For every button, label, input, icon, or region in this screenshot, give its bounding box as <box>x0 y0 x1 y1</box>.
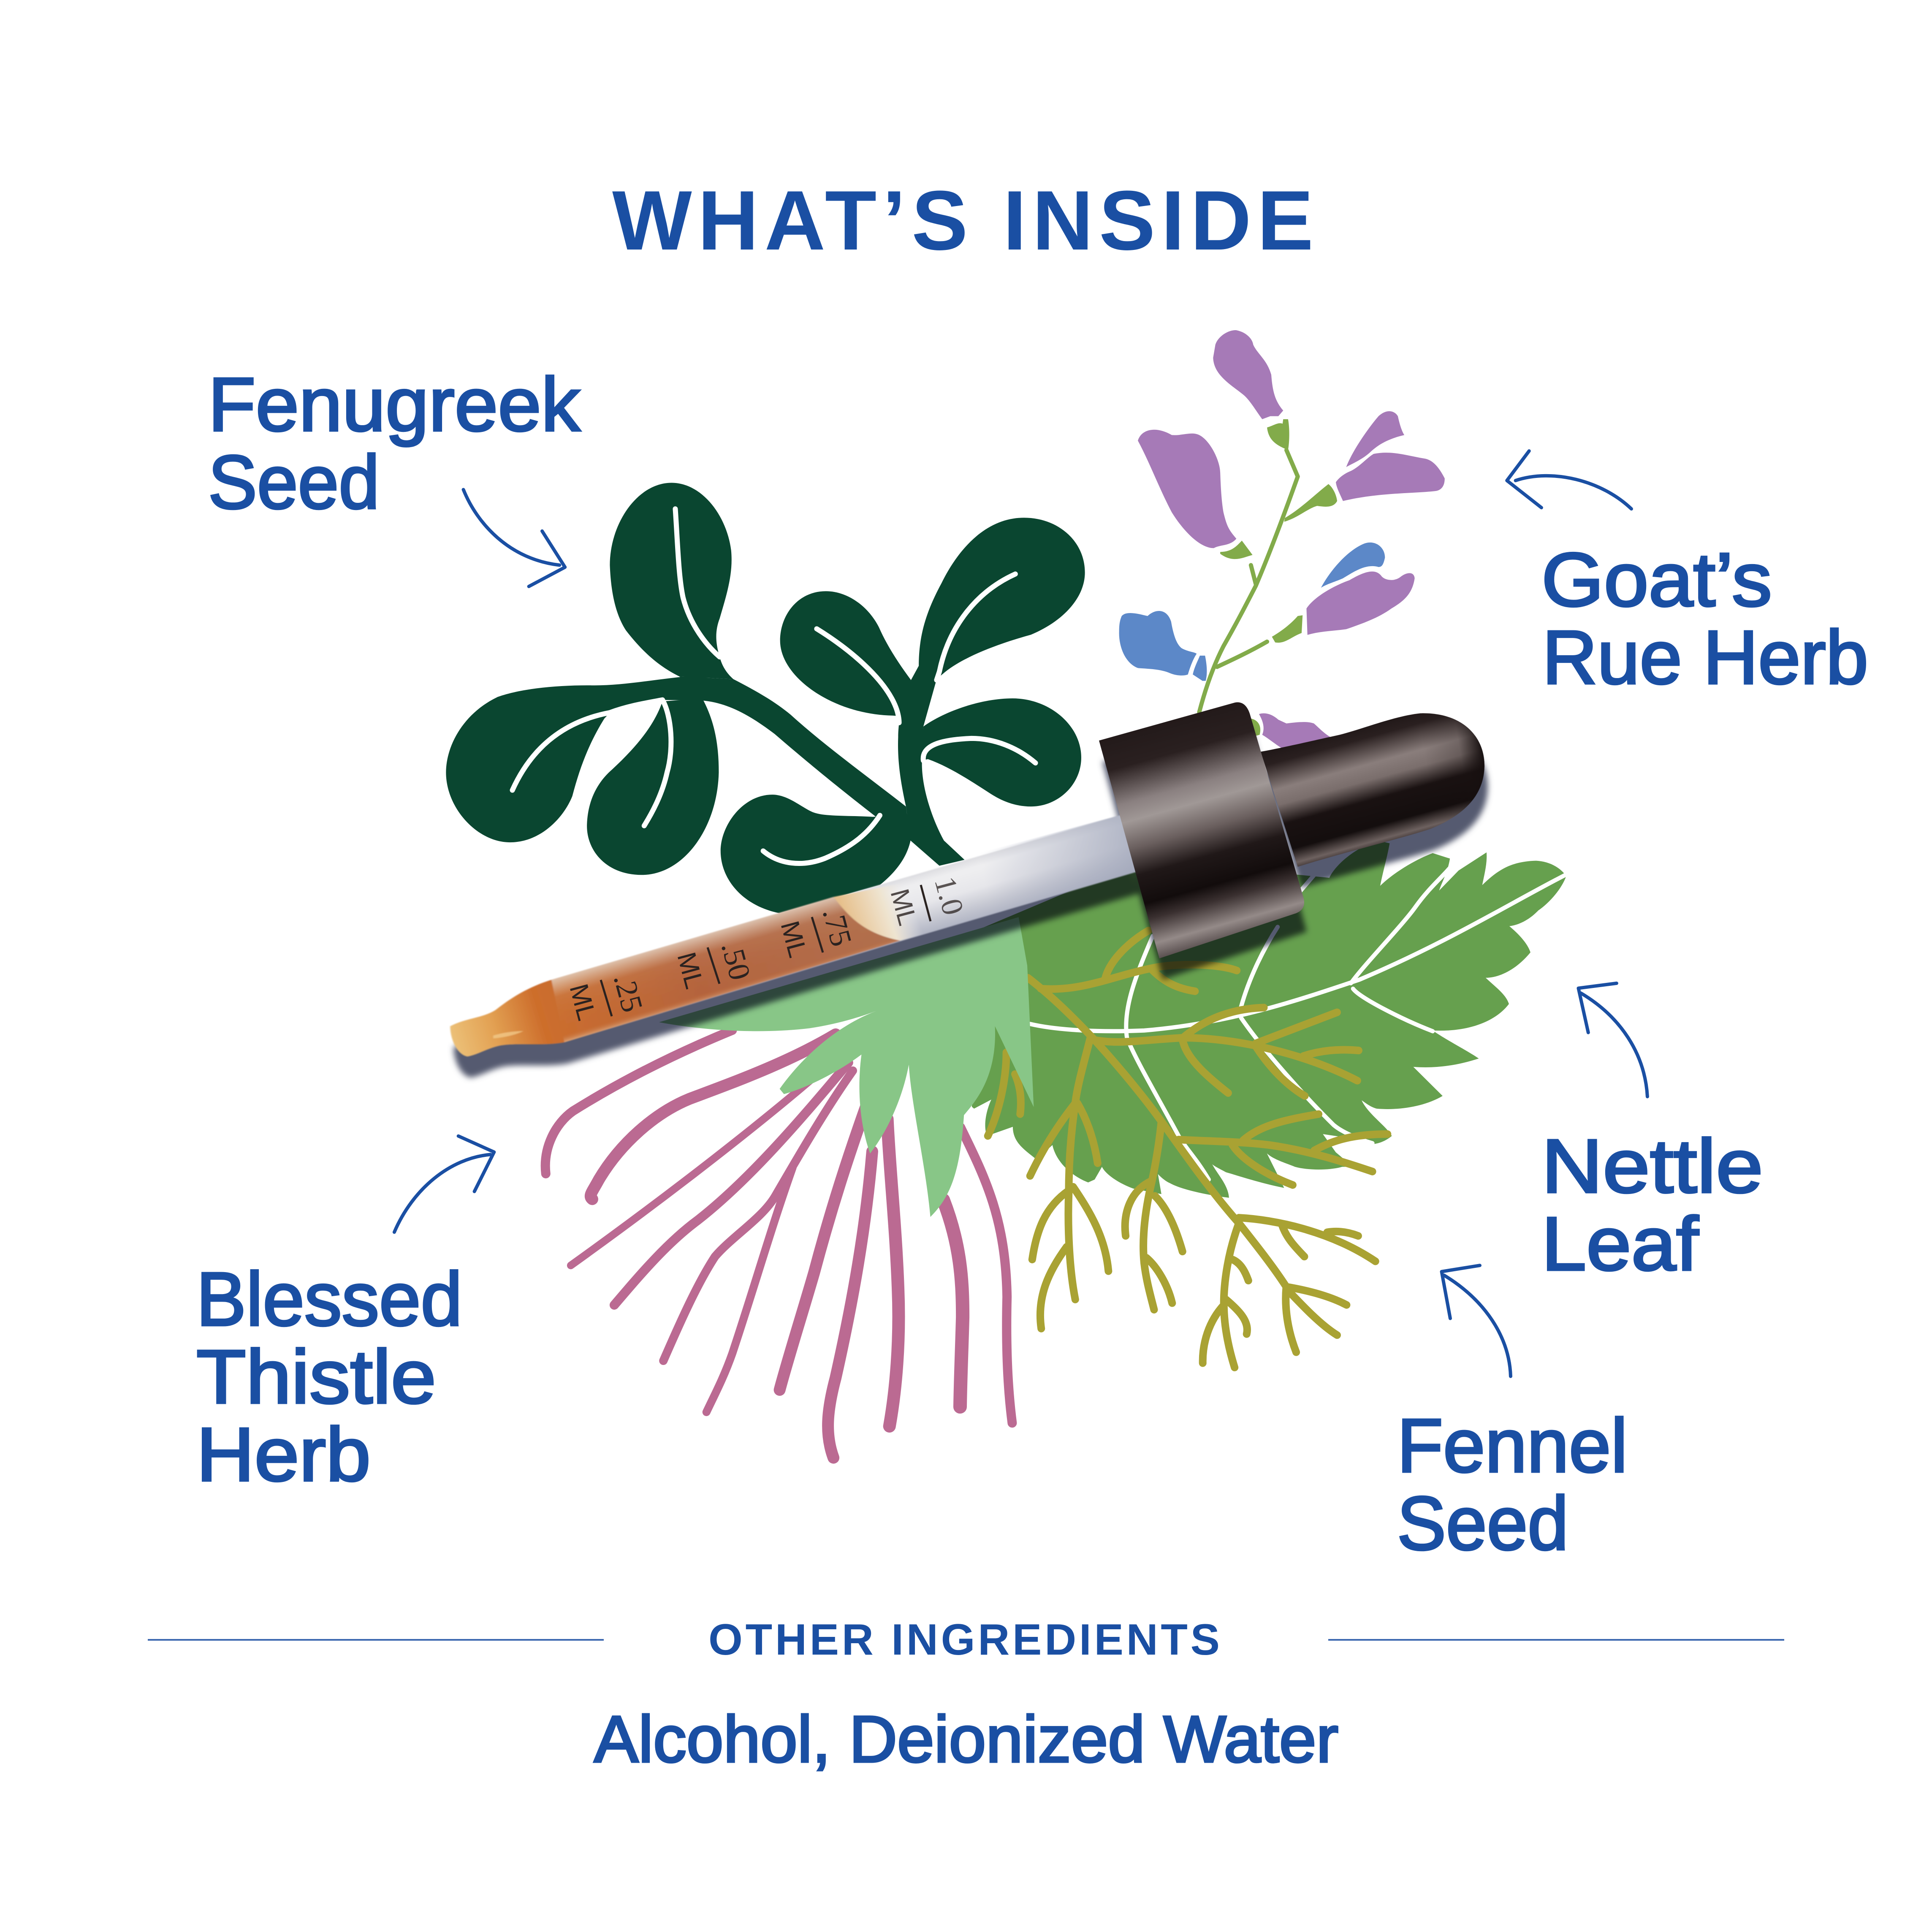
label: nettle leaf: Leaf <box>1541 1202 1699 1286</box>
dropper tube <box>450 811 1154 1056</box>
illustration: dropper <box>450 702 1484 1056</box>
title: WHAT’S INSIDE <box>612 174 1313 268</box>
arrow: fennel <box>1442 1265 1511 1376</box>
illustration: nettle leaf <box>972 841 1566 1198</box>
dropper measurement labels <box>564 873 970 1023</box>
label: blessed thistle herb <box>196 1257 462 1497</box>
label: goat's rue herb: Rue Herb <box>1542 615 1868 700</box>
dropper measurement labels: .75 <box>816 904 858 950</box>
dropper measurement labels: ML <box>885 886 922 928</box>
dropper measurement lines <box>601 885 931 1016</box>
arrow: nettle <box>1578 983 1647 1096</box>
illustration: fennel seed sprigs <box>988 931 1387 1368</box>
fenugreek veins <box>513 509 1036 863</box>
subheading: other ingredients: OTHER INGREDIENTS <box>708 1615 1220 1664</box>
dropper measurement labels: .25 <box>607 970 649 1016</box>
label: goat's rue herb <box>1541 537 1868 700</box>
dropper measurement labels: .50 <box>715 938 757 984</box>
dropper measurement labels: ML <box>564 981 601 1023</box>
label: fenugreek seed: Fenugreek <box>208 362 581 447</box>
dropper shadow <box>453 723 1488 1077</box>
label: blessed thistle herb: Blessed <box>196 1257 462 1342</box>
dropper measurement labels: 1.0 <box>928 873 970 919</box>
arrows <box>394 451 1647 1376</box>
label: fennel seed: Fennel <box>1397 1403 1628 1488</box>
label: fenugreek seed <box>208 362 581 525</box>
arrow: goat's rue <box>1507 451 1631 509</box>
label: blessed thistle herb: Thistle <box>196 1335 436 1419</box>
illustration: fenugreek leaves <box>446 483 1085 913</box>
illustration: blessed thistle fronds <box>545 1030 1012 1458</box>
label: nettle leaf <box>1541 1124 1763 1286</box>
label: fennel seed <box>1397 1403 1628 1566</box>
arrow: fenugreek <box>464 490 565 586</box>
dropper cap <box>1099 702 1304 958</box>
dropper measurement labels: ML <box>671 949 709 992</box>
label: blessed thistle herb: Herb <box>196 1412 371 1497</box>
label: fenugreek seed: Seed <box>208 440 380 525</box>
arrow: blessed thistle <box>394 1136 494 1232</box>
label: fennel seed: Seed <box>1397 1481 1568 1566</box>
illustration: blessed thistle leaf <box>659 917 1034 1217</box>
text: other ingredients list: Alcohol, Deionized Water <box>594 1703 1338 1776</box>
dropper bulb <box>1261 713 1484 867</box>
illustration: goat's rue herb <box>1119 330 1445 748</box>
label: goat's rue herb: Goat’s <box>1541 537 1772 622</box>
nettle veins <box>1030 852 1566 1180</box>
dropper measurement labels: ML <box>775 918 812 961</box>
label: nettle leaf: Nettle <box>1541 1124 1763 1209</box>
